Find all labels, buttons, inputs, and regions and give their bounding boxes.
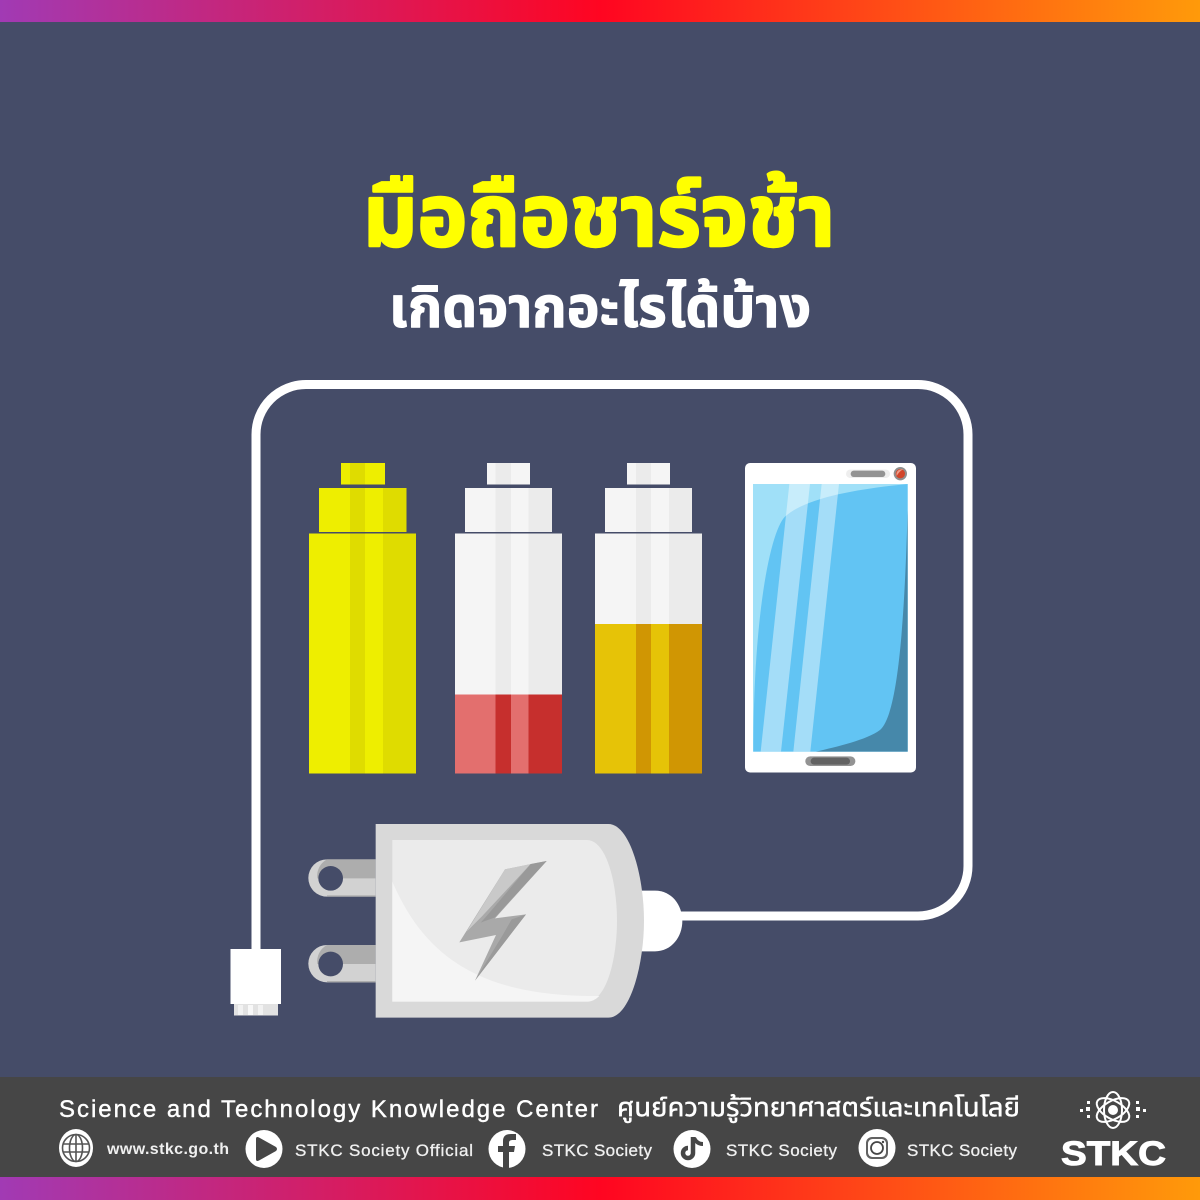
website label: www.stkc.go.th <box>106 1141 229 1158</box>
icon: charger plug <box>308 824 682 1018</box>
video channel label: STKC Society Official <box>295 1141 473 1160</box>
title: มือถือชาร์จช้า <box>363 168 835 265</box>
footer panel <box>0 1077 1200 1177</box>
upper prong <box>308 859 376 897</box>
icon: full yellow battery <box>309 463 416 774</box>
icon: medium amber battery <box>595 463 702 774</box>
cable strain relief <box>640 891 682 951</box>
face highlight <box>392 882 599 1002</box>
icon: tiktok <box>674 1130 710 1168</box>
icon: smartphone <box>745 463 916 772</box>
icon: lightning bolt <box>459 861 547 981</box>
charger face <box>392 840 617 1002</box>
icon: USB connector <box>230 949 281 1016</box>
icon: website globe <box>59 1129 93 1167</box>
instagram label: STKC Society <box>907 1141 1018 1160</box>
logo: STKC <box>1061 1092 1166 1173</box>
charger body <box>376 824 644 1018</box>
icon: video play <box>246 1130 282 1168</box>
icon: low red battery <box>455 463 562 774</box>
charging cable <box>256 384 968 952</box>
footer heading english: Science and Technology Knowledge Center <box>59 1096 598 1123</box>
bottom gradient bar <box>0 1177 1200 1200</box>
footer heading thai: ศูนย์ความรู้วิทยาศาสตร์และเทคโนโลยี <box>617 1092 1020 1123</box>
lower prong <box>308 945 376 982</box>
logo atom mark <box>1080 1092 1146 1128</box>
top gradient bar <box>0 0 1200 22</box>
icon: facebook <box>488 1130 526 1168</box>
icon: instagram <box>858 1129 896 1167</box>
subtitle: เกิดจากอะไรได้บ้าง <box>389 276 811 340</box>
facebook label: STKC Society <box>542 1141 652 1160</box>
logo wordmark: STKC <box>1061 1135 1166 1173</box>
tiktok label: STKC Society <box>726 1141 838 1160</box>
